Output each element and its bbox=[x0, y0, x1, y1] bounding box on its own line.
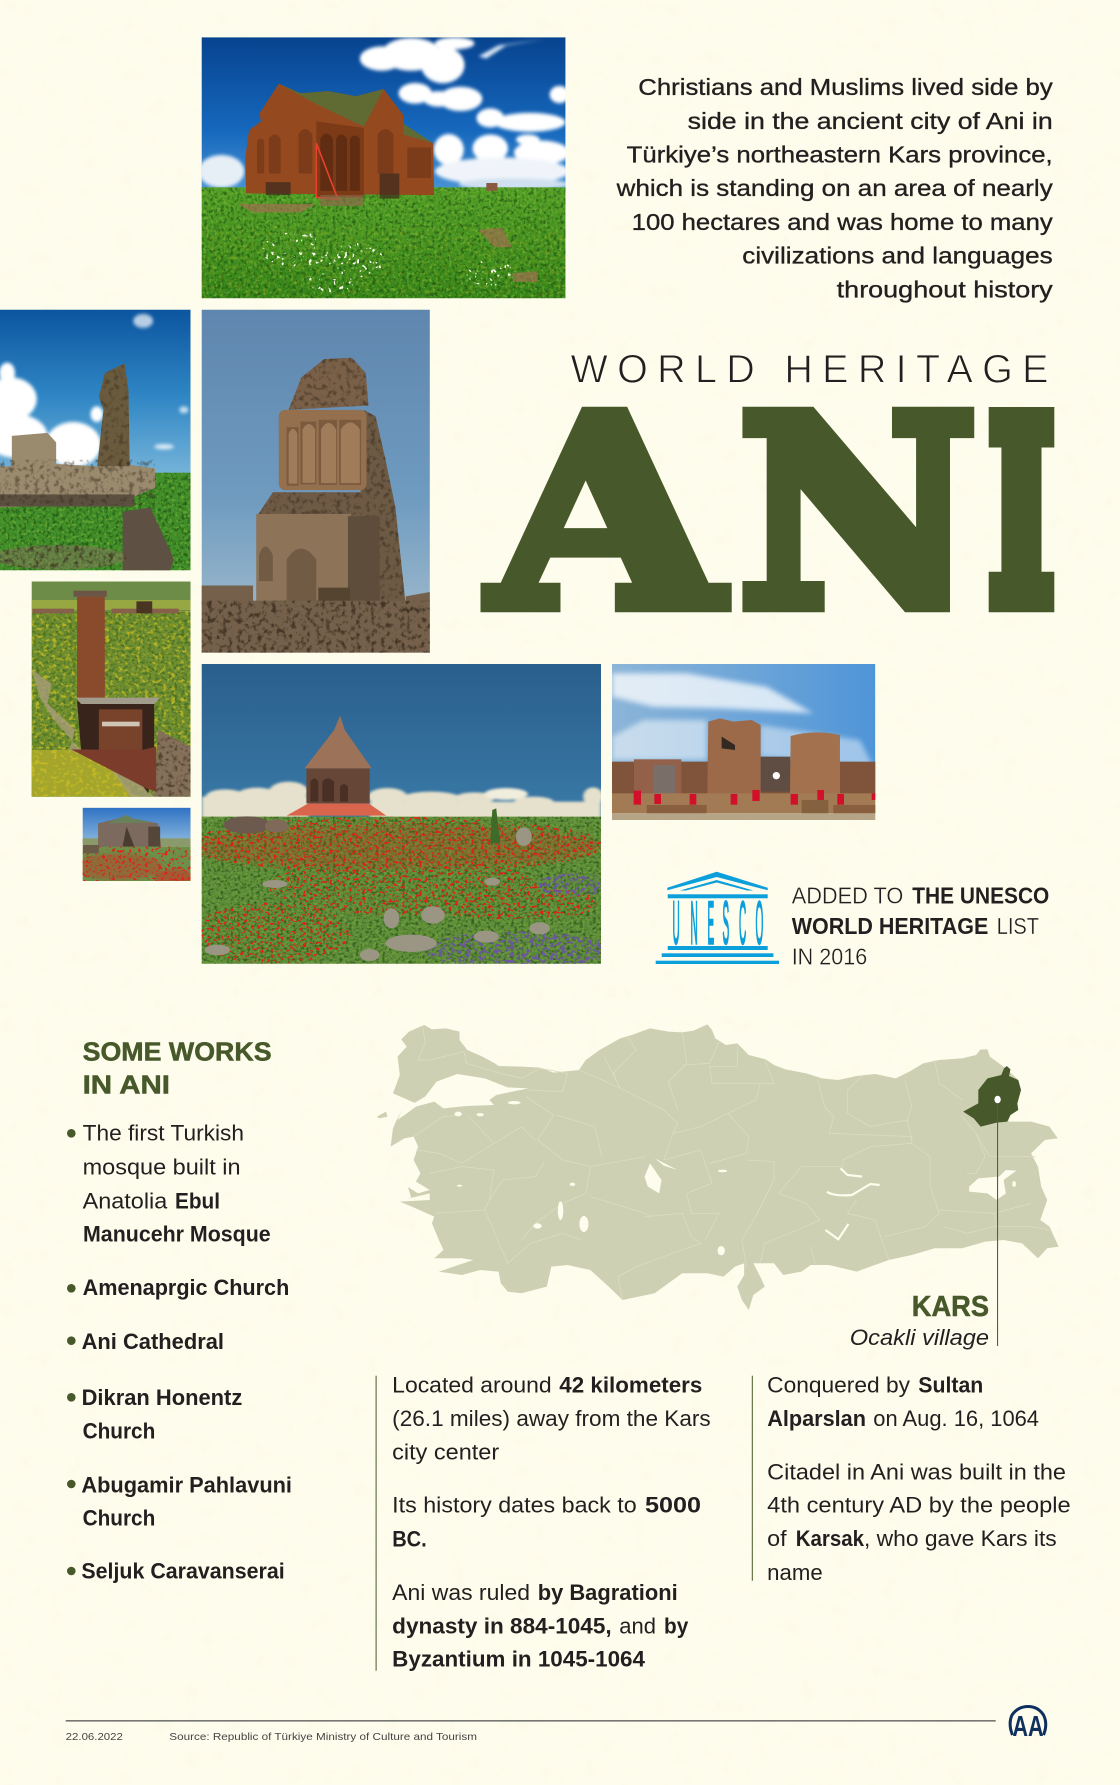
footer rule bbox=[66, 1720, 996, 1722]
footer date: 22.06.2022 bbox=[66, 1731, 123, 1743]
photo: Church of Saint Gregory with poppy field bbox=[186, 664, 613, 968]
icon: UNESCO temple logo: N bbox=[690, 890, 698, 957]
title: ANI bbox=[486, 359, 1053, 668]
column: conquest and citadel: , who gave Kars its bbox=[864, 1526, 1057, 1551]
column: conquest and citadel bbox=[752, 1373, 1071, 1585]
photo: ruined tower with blue sky bbox=[0, 310, 191, 571]
intro paragraph: 100 hectares and was home to many bbox=[632, 209, 1053, 235]
list: works in Ani: Anatolia bbox=[83, 1188, 168, 1213]
column: conquest and citadel: of bbox=[767, 1526, 788, 1551]
photo: Ani Cathedral on green meadow bbox=[198, 37, 569, 298]
list: works in Ani: Amenaprgic Church bbox=[83, 1275, 289, 1300]
list: works in Ani: Ani Cathedral bbox=[82, 1329, 224, 1354]
column: location and history: city center bbox=[392, 1439, 499, 1464]
label: Kars, Ocakli village: Ocakli village bbox=[850, 1325, 989, 1350]
photo: cathedral with poppies, small bbox=[82, 808, 191, 881]
list: works in Ani: mosque built in bbox=[83, 1154, 241, 1179]
UNESCO listing note: ADDED TO bbox=[792, 882, 903, 908]
subtitle: world heritage: WORLD HERITAGE bbox=[570, 347, 1048, 391]
photo: Ebul Manucehr Mosque minaret bbox=[32, 581, 191, 798]
UNESCO listing note: LIST bbox=[997, 913, 1039, 939]
UNESCO listing note: THE UNESCO bbox=[912, 882, 1049, 908]
leader line and marker for Ani bbox=[994, 1096, 1001, 1346]
column: conquest and citadel: name bbox=[767, 1560, 823, 1585]
Kars province highlight bbox=[963, 1066, 1021, 1127]
column: location and history bbox=[376, 1373, 711, 1672]
list: works in Ani: Dikran Honentz bbox=[82, 1385, 242, 1410]
column: location and history: by bbox=[664, 1613, 689, 1638]
icon: Anadolu Agency logo bbox=[1010, 1706, 1046, 1743]
icon: UNESCO temple logo: S bbox=[722, 890, 729, 957]
heading: some works in Ani: SOME WORKS bbox=[83, 1039, 272, 1067]
column: location and history: by Bagrationi bbox=[538, 1580, 678, 1605]
column: location and history: Located around bbox=[392, 1373, 552, 1398]
icon: UNESCO temple logo: O bbox=[756, 890, 763, 957]
column: location and history: BC. bbox=[392, 1527, 427, 1552]
UNESCO listing note: IN 2016 bbox=[792, 944, 867, 970]
intro paragraph: Christians and Muslims lived side by bbox=[638, 74, 1053, 100]
column: location and history: and bbox=[619, 1613, 656, 1638]
heading: some works in Ani: IN ANI bbox=[83, 1071, 170, 1099]
map of Türkiye with provinces bbox=[377, 1024, 1059, 1310]
list: works in Ani: Ebul bbox=[175, 1188, 220, 1213]
footer source: Source: Republic of Türkiye Ministry of Culture and Tourism bbox=[169, 1731, 477, 1743]
list: works in Ani: Seljuk Caravanserai bbox=[81, 1558, 285, 1583]
column: location and history: (26.1 miles) away from the Kars bbox=[392, 1406, 711, 1431]
column: location and history: Ani was ruled bbox=[392, 1580, 530, 1605]
intro paragraph bbox=[616, 74, 1053, 302]
column: conquest and citadel: Alparslan bbox=[767, 1406, 866, 1431]
column: location and history: 5000 bbox=[645, 1493, 701, 1518]
title: ANI: N bbox=[739, 361, 977, 666]
icon: UNESCO temple logo: E bbox=[708, 890, 714, 957]
list: works in Ani: Abugamir Pahlavuni bbox=[81, 1472, 292, 1497]
icon: UNESCO temple logo: U bbox=[672, 890, 680, 957]
title: ANI: A bbox=[486, 359, 727, 668]
intro paragraph: side in the ancient city of Ani in bbox=[688, 108, 1053, 134]
column: conquest and citadel: Citadel in Ani was built in the bbox=[767, 1459, 1066, 1484]
column: conquest and citadel: on Aug. 16, 1064 bbox=[873, 1406, 1039, 1431]
list: works in Ani: Manucehr Mosque bbox=[83, 1222, 271, 1247]
list: works in Ani: Church bbox=[83, 1506, 155, 1531]
label: Kars, Ocakli village: KARS bbox=[912, 1291, 989, 1323]
intro paragraph: Türkiye’s northeastern Kars province, bbox=[627, 142, 1053, 168]
list: works in Ani: Church bbox=[83, 1418, 155, 1443]
UNESCO listing note: WORLD HERITAGE bbox=[792, 913, 988, 939]
column: conquest and citadel: Conquered by bbox=[767, 1373, 910, 1398]
column: conquest and citadel: 4th century AD by the people bbox=[767, 1493, 1071, 1518]
column: conquest and citadel: Sultan bbox=[918, 1373, 983, 1398]
intro paragraph: civilizations and languages bbox=[742, 242, 1053, 268]
title: ANI: I bbox=[990, 368, 1053, 657]
icon: UNESCO temple logo bbox=[656, 872, 779, 964]
column: location and history: Its history dates back to bbox=[392, 1493, 637, 1518]
column: location and history: Byzantium in 1045-1064 bbox=[392, 1647, 646, 1672]
list: works in Ani bbox=[67, 1121, 292, 1583]
label: Kars, Ocakli village bbox=[850, 1291, 989, 1350]
column: location and history: 42 kilometers bbox=[559, 1373, 702, 1398]
column: conquest and citadel: Karsak bbox=[796, 1526, 865, 1551]
list: works in Ani: The first Turkish bbox=[83, 1121, 244, 1146]
UNESCO listing note bbox=[792, 882, 1049, 970]
intro paragraph: throughout history bbox=[837, 276, 1053, 302]
column: location and history: dynasty in 884-1045, bbox=[392, 1613, 612, 1638]
intro paragraph: which is standing on an area of nearly bbox=[616, 175, 1053, 201]
photo: citadel walls with Turkish flags bbox=[612, 664, 879, 821]
icon: UNESCO temple logo: C bbox=[739, 890, 746, 957]
icon: Anadolu Agency logo: AA bbox=[1012, 1711, 1044, 1743]
heading: some works in Ani bbox=[83, 1039, 272, 1099]
photo: Church of the Redeemer half-ruined drum bbox=[202, 310, 430, 653]
